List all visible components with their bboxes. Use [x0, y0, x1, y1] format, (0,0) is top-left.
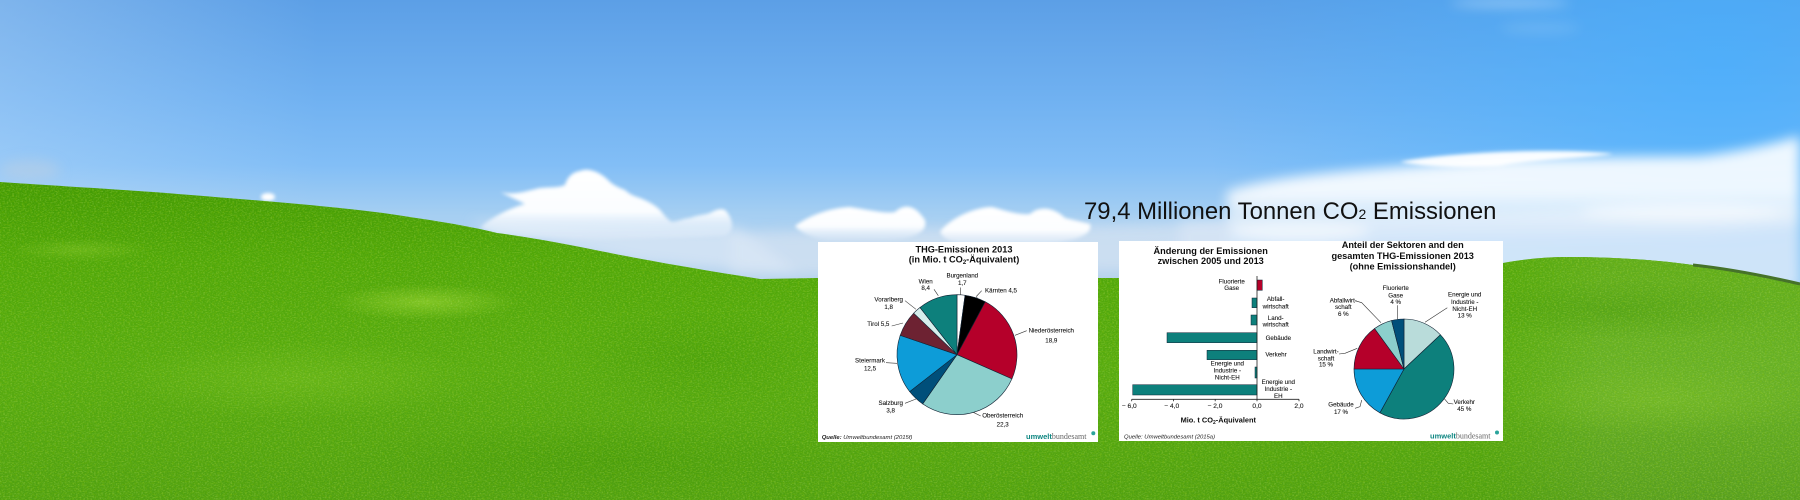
pie labels: Wien: [919, 278, 933, 285]
pie labels: schaft: [1318, 355, 1335, 362]
bar labels: wirtschaft: [1262, 322, 1289, 329]
bar labels: EH: [1274, 393, 1283, 400]
pie labels: Fluorierte: [1383, 285, 1409, 292]
bar labels: Industrie -: [1265, 386, 1292, 393]
pie labels: 8,4: [921, 285, 931, 292]
panel: THG-Emissionen 2013 pie chart: [818, 242, 1098, 442]
pie labels: Oberösterreich: [982, 413, 1024, 420]
heading: THG-Emissionen: THG-Emissionen 2013: [915, 245, 1013, 255]
bar labels: Fluorierte: [1219, 278, 1245, 285]
heading: THG-Emissionen: -Äquivalent): [966, 255, 1019, 265]
heading: Anteil der Sektoren: Anteil der Sektoren and den: [1342, 240, 1464, 250]
pie labels: 1,7: [958, 280, 967, 287]
heading: Anteil der Sektoren: gesamten THG-Emissionen 2013: [1331, 251, 1474, 261]
bar labels: Abfall-: [1267, 296, 1284, 303]
axis title: -Äquivalent: [1216, 416, 1257, 425]
heading: THG-Emissionen: 2: [963, 260, 967, 266]
pie labels: 45 %: [1457, 406, 1472, 413]
pie labels: [855, 273, 1075, 429]
axis title: Mio. t CO: [1181, 416, 1213, 425]
pie labels: [1313, 285, 1482, 416]
pie labels: 17 %: [1334, 409, 1349, 416]
axis title: 2: [1213, 420, 1216, 426]
pie labels: 13 %: [1458, 313, 1472, 320]
bar labels: [1211, 278, 1296, 400]
bar labels: wirtschaft: [1262, 303, 1289, 310]
bar labels: Gase: [1224, 285, 1240, 292]
pie labels: 18,9: [1045, 337, 1058, 344]
bars: [1133, 280, 1262, 395]
pie labels: Vorarlberg: [874, 297, 904, 304]
logo: umweltbundesamt: umweltbundesamt: [1026, 432, 1087, 441]
bar chart: Änderung der Emissionen: [1122, 246, 1304, 440]
pie labels: Kärnten 4,5: [985, 287, 1018, 294]
bar labels: Energie und: [1211, 360, 1245, 367]
pie labels: Landwirt-: [1313, 349, 1339, 356]
pie slices: [1354, 319, 1454, 419]
axis tick labels: 2,0: [1294, 403, 1304, 410]
bar labels: Gebäude: [1266, 335, 1292, 342]
pie labels: Abfallwirt-: [1330, 297, 1357, 304]
pie labels: Energie und: [1448, 292, 1482, 299]
pie labels: Nicht-EH: [1452, 306, 1477, 313]
grass hills: [0, 170, 1800, 500]
heading: Änderung der Emissionen: zwischen 2005 und 2013: [1158, 256, 1264, 266]
pie labels: 15 %: [1319, 362, 1334, 369]
axes: [1132, 276, 1299, 401]
pie labels: 1,8: [884, 304, 894, 311]
bar labels: Nicht-EH: [1215, 375, 1240, 382]
bar labels: Industrie -: [1214, 368, 1241, 375]
pie labels: 3,8: [886, 408, 896, 415]
axis tick labels: − 6,0: [1122, 403, 1137, 410]
pie: emissions by Bundesland: [897, 295, 1017, 415]
axis tick labels: − 2,0: [1208, 403, 1223, 410]
pie labels: Gebäude: [1328, 402, 1354, 409]
heading: Anteil der Sektoren: (ohne Emissionshandel): [1350, 261, 1456, 271]
clouds: [0, 0, 1800, 290]
pie labels: 12,5: [864, 366, 877, 373]
pie labels: Niederösterreich: [1029, 328, 1075, 335]
pie labels: Salzburg: [878, 400, 903, 407]
pie labels: Steiermark: [855, 358, 886, 365]
pie labels: Burgenland: [946, 273, 979, 280]
heading: THG-Emissionen: (in Mio. t CO: [909, 255, 963, 265]
panel: sector charts: [1119, 240, 1503, 441]
heading: Änderung der Emissionen: Änderung der Emissionen: [1154, 246, 1268, 256]
pie labels: 6 %: [1338, 311, 1349, 318]
axis tick labels: [1122, 403, 1304, 410]
bar labels: Land-: [1268, 315, 1284, 322]
pie labels: Gase: [1388, 292, 1404, 299]
pie chart: Anteil der Sektoren: [1313, 240, 1499, 440]
logo: umweltbundesamt: umweltbundesamt: [1430, 432, 1491, 440]
pie labels: 4 %: [1390, 299, 1402, 306]
pie labels: Tirol 5,5: [867, 321, 890, 328]
sky background: [0, 0, 1800, 300]
axis tick labels: − 4,0: [1164, 403, 1179, 410]
distant tree line on right ridge: [1693, 265, 1800, 284]
source note: Quelle: Umweltbundesamt (2015a): [1124, 434, 1215, 440]
pie labels: schaft: [1335, 304, 1352, 311]
pie labels: Industrie -: [1451, 299, 1478, 306]
title: 79,4 Millionen Tonnen CO2 Emissionen: [1084, 198, 1496, 225]
axis tick labels: 0,0: [1252, 403, 1262, 410]
pie labels: 22,3: [997, 422, 1009, 429]
bar labels: Verkehr: [1265, 352, 1287, 359]
source note: Quelle: Umweltbundesamt (2015f): [822, 435, 912, 441]
pie labels: Verkehr: [1454, 399, 1475, 406]
bar labels: Energie und: [1262, 379, 1296, 386]
